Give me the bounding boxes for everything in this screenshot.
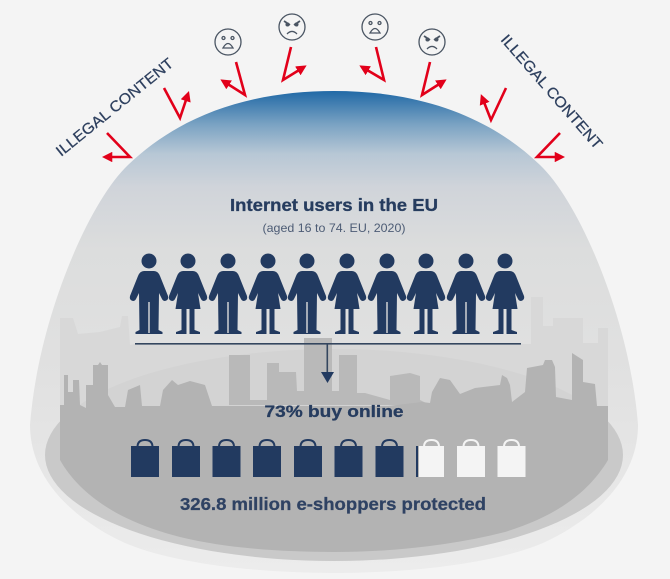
- stat: e-shoppers protected: 326.8 million e-shoppers protected: [180, 494, 486, 514]
- right label: illegal content: ILLEGAL CONTENT: [497, 31, 606, 153]
- background skyline: [60, 297, 608, 420]
- red arrows: [105, 47, 562, 157]
- baseline and down arrow: [135, 343, 521, 383]
- icon: frightened face: [362, 14, 388, 40]
- dome: [30, 91, 638, 573]
- left label: illegal content: ILLEGAL CONTENT: [53, 55, 177, 160]
- floor ellipse: [45, 349, 623, 561]
- heading: Internet users in the EU: [230, 195, 438, 215]
- stat: 73% buy online: 73% buy online: [264, 402, 404, 421]
- icon: frightened face: [215, 29, 241, 55]
- icon: angry face: [279, 14, 305, 40]
- mid skyline: [229, 338, 430, 405]
- front skyline: [60, 353, 608, 552]
- people pictogram: [130, 254, 524, 334]
- icon: angry face: [419, 29, 445, 55]
- subheading: (aged 16 to 74. EU, 2020): [262, 221, 406, 235]
- shopping bags pictogram: [131, 440, 526, 477]
